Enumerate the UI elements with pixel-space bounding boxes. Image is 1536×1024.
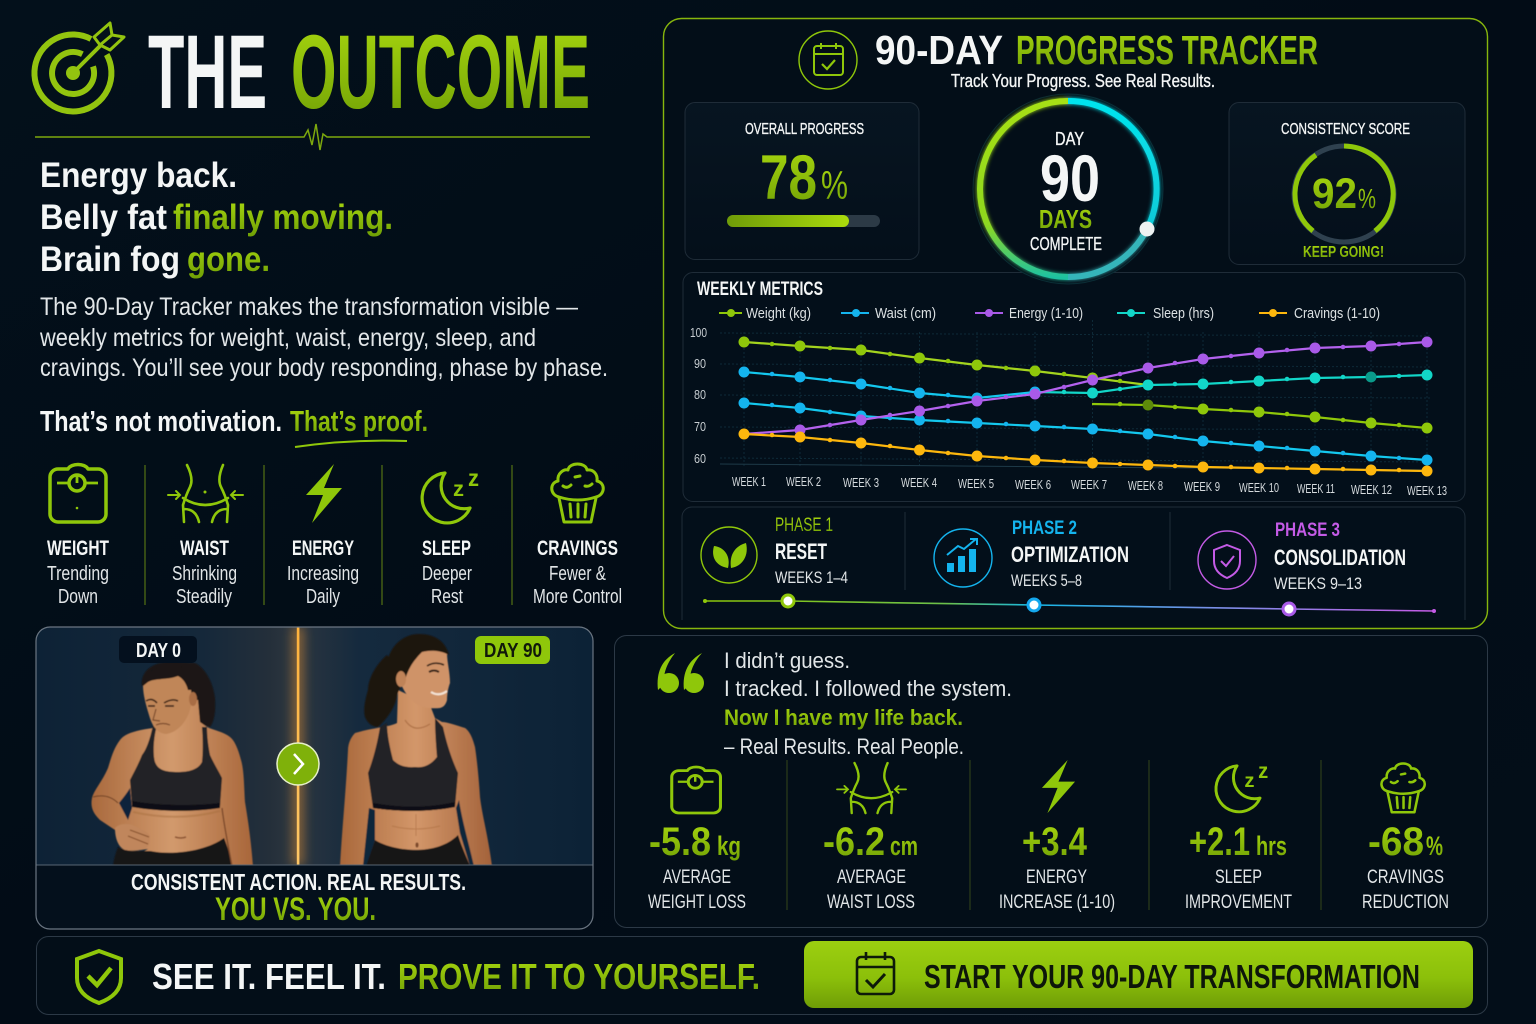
metric: waist [168, 465, 243, 608]
slogan [152, 956, 760, 997]
y axis labels [690, 325, 707, 466]
icon: moon [422, 465, 479, 523]
icon: leaves [701, 527, 757, 583]
phase 2: OPTIMIZATION [1011, 542, 1129, 567]
phase 1: PHASE 1 [775, 515, 833, 536]
gauge: day 90 ring: DAYS [1039, 204, 1092, 234]
chart legend: Sleep (hrs) [1153, 305, 1214, 322]
arrow: before to after [277, 743, 319, 785]
stat: energy increase: ENERGY [1026, 867, 1087, 888]
phase 3 [1198, 520, 1406, 593]
body paragraph: weekly metrics for weight, waist, energy, sleep, and [39, 324, 536, 352]
chart legend: Energy (1-10) [1009, 305, 1083, 322]
phase 2: PHASE 2 [1012, 518, 1077, 539]
icon: lightning bolt [1042, 760, 1075, 813]
icon: calendar [857, 952, 894, 994]
title: OUTCOME [291, 14, 590, 131]
icon: muffin [552, 464, 603, 522]
x axis labels [732, 474, 1447, 498]
icon: shield check [77, 951, 121, 1003]
stat: waist loss: AVERAGE [837, 867, 906, 888]
gauge: day 90 ring: COMPLETE [1030, 234, 1102, 254]
panel: phases [682, 507, 1465, 620]
bottom call to action bar [36, 936, 1488, 1014]
label: day 0 [119, 636, 197, 663]
phase timeline [703, 595, 1436, 615]
testimonial text: I tracked. I followed the system. [724, 676, 1012, 701]
headline [40, 156, 393, 279]
testimonial text: Now I have my life back. [724, 705, 963, 730]
card: overall progress [685, 102, 919, 260]
panel: before and after photo [36, 627, 593, 929]
series: energy [744, 336, 1432, 436]
photo comparison [36, 627, 593, 866]
icon: target with arrow [34, 23, 124, 111]
headline: gone. [187, 240, 270, 279]
icon: lightning bolt [306, 464, 342, 523]
stat: energy increase: +3.4 [1022, 820, 1088, 864]
metric: energy [287, 464, 359, 608]
testimonial text: I didn’t guess. [724, 648, 850, 673]
phase 1 [701, 515, 848, 587]
chart legend [719, 305, 1380, 322]
gauge: day 90 ring: 90 [1040, 141, 1100, 215]
icon: waist [837, 763, 906, 813]
stat: waist loss: -6.2 [823, 820, 885, 864]
stat: cravings reduction: % [1426, 831, 1443, 861]
tracker header: PROGRESS TRACKER [1016, 27, 1318, 73]
metric: weight: WEIGHT [47, 537, 109, 560]
glowing divider [292, 627, 304, 865]
panel: progress tracker [664, 18, 1488, 628]
body paragraph [39, 293, 608, 382]
x axis labels: WEEK 2 [786, 474, 821, 489]
x axis labels: WEEK 8 [1128, 478, 1163, 493]
metric: weight: Trending [47, 563, 109, 585]
chart legend: Cravings (1-10) [1294, 305, 1380, 322]
quote mark [658, 653, 704, 693]
icon: calendar [799, 31, 857, 89]
card: consistency score: 92 [1312, 170, 1357, 218]
x axis labels: WEEK 4 [901, 475, 937, 490]
metric: waist: Steadily [176, 586, 232, 608]
label: day 0: DAY 0 [136, 640, 181, 662]
x axis labels: WEEK 1 [732, 474, 766, 489]
card: overall progress: OVERALL PROGRESS [745, 121, 864, 138]
left header [34, 14, 590, 131]
metric: weight [47, 464, 109, 608]
y axis labels: 70 [694, 419, 706, 434]
metric: energy: ENERGY [292, 537, 354, 560]
x axis labels: WEEK 9 [1184, 479, 1220, 494]
phase 1: RESET [775, 539, 827, 564]
card: consistency score: % [1358, 183, 1376, 214]
metric: cravings: Fewer & [549, 563, 607, 585]
x axis labels: WEEK 12 [1351, 482, 1392, 497]
metric: waist: Shrinking [172, 563, 237, 585]
metric: sleep: Deeper [422, 563, 472, 585]
stat: cravings reduction: CRAVINGS [1367, 867, 1444, 888]
label: day 90: DAY 90 [484, 640, 542, 662]
stat: cravings reduction [1362, 764, 1449, 913]
x axis labels: WEEK 10 [1239, 480, 1279, 495]
y axis labels: 90 [694, 356, 706, 371]
stat: sleep improvement [1185, 760, 1292, 913]
body paragraph: cravings. You’ll see your body responding, phase by phase. [40, 354, 608, 382]
heartbeat divider [35, 124, 590, 150]
tracker header: Track Your Progress. See Real Results. [951, 71, 1215, 91]
metric icon row [47, 464, 622, 608]
testimonial text: – Real Results. Real People. [724, 734, 964, 759]
testimonial text [724, 648, 1012, 759]
caption [131, 869, 466, 927]
icon: moon: z [453, 478, 464, 501]
panel: weekly metrics chart: WEEKLY METRICS [697, 279, 823, 300]
chart legend: Waist (cm) [875, 305, 936, 322]
tracker header [799, 27, 1318, 91]
proof statement: That’s not motivation. [40, 406, 282, 438]
series: waist [738, 366, 1432, 466]
tracker header: 90-DAY [875, 27, 1003, 73]
metric: sleep: SLEEP [422, 537, 471, 560]
caption: YOU VS. YOU. [215, 891, 376, 927]
person: day 0 [91, 662, 253, 866]
slogan: PROVE IT TO YOURSELF. [398, 956, 760, 997]
stat: weight loss: -5.8 [649, 820, 711, 864]
icon: moon: z [1244, 771, 1254, 792]
metric: cravings [533, 464, 622, 608]
stat: weight loss [648, 767, 746, 913]
headline: finally moving. [173, 198, 393, 237]
phase 2 [934, 518, 1129, 590]
series: cravings [738, 428, 1432, 476]
stat: sleep improvement: IMPROVEMENT [1185, 892, 1292, 913]
card: consistency score: CONSISTENCY SCORE [1281, 121, 1410, 138]
icon: moon: z [468, 465, 479, 491]
metric: energy: Daily [306, 586, 340, 608]
gauge: day 90 ring: DAY [1055, 129, 1084, 149]
x axis labels: WEEK 13 [1407, 483, 1447, 498]
slogan: SEE IT. FEEL IT. [152, 956, 386, 997]
icon: muffin [1381, 764, 1425, 812]
stat: cravings reduction: REDUCTION [1362, 892, 1449, 913]
headline: Energy back. [40, 156, 237, 195]
proof statement: That’s proof. [290, 406, 428, 438]
body paragraph: The 90-Day Tracker makes the transformation visible — [40, 293, 578, 321]
x axis labels: WEEK 6 [1015, 477, 1051, 492]
label: day 90 [475, 636, 550, 664]
metric: sleep: Rest [431, 586, 463, 608]
icon: scale [50, 464, 106, 522]
stat: weight loss: WEIGHT LOSS [648, 892, 746, 913]
y axis labels: 80 [694, 387, 706, 402]
proof statement [40, 406, 428, 447]
phase 1: WEEKS 1–4 [775, 568, 848, 587]
metric: waist: WAIST [180, 537, 229, 560]
x axis labels: WEEK 7 [1071, 477, 1107, 492]
phase 3: CONSOLIDATION [1274, 545, 1406, 570]
stat: weight loss: AVERAGE [663, 867, 731, 888]
panel: weekly metrics chart [683, 272, 1465, 502]
gauge: day 90 ring [973, 94, 1163, 284]
y axis labels: 100 [690, 325, 707, 340]
icon: waist [168, 465, 243, 522]
stat: sleep improvement: SLEEP [1215, 867, 1262, 888]
metric: cravings: More Control [533, 586, 622, 608]
card: consistency score [1229, 102, 1465, 264]
stat: energy increase: INCREASE (1-10) [999, 892, 1115, 913]
y axis labels: 60 [694, 451, 706, 466]
icon: shield check [1198, 531, 1256, 589]
caption: CONSISTENT ACTION. REAL RESULTS. [131, 869, 466, 895]
stat: cravings reduction: -68 [1368, 820, 1424, 864]
metric: energy: Increasing [287, 563, 359, 585]
stat: weight loss: kg [717, 831, 741, 861]
series: weight [738, 336, 1432, 434]
stat: sleep improvement: +2.1 [1189, 820, 1250, 864]
phase 2: WEEKS 5–8 [1011, 571, 1082, 590]
phase 3: WEEKS 9–13 [1274, 574, 1362, 593]
icon: rising bars [934, 529, 992, 587]
stat: waist loss: cm [890, 831, 918, 861]
card: overall progress: 78 [760, 143, 817, 213]
icon: scale [672, 767, 720, 813]
stat: waist loss: WAIST LOSS [827, 892, 915, 913]
phase 3: PHASE 3 [1275, 520, 1340, 541]
person: day 90 [340, 634, 492, 866]
series: sleep [1035, 370, 1432, 398]
headline: Belly fat [40, 198, 167, 237]
metric: cravings: CRAVINGS [537, 537, 618, 560]
chart legend: Weight (kg) [746, 305, 811, 322]
metric: sleep [422, 465, 479, 608]
panel: testimonial and results [614, 636, 1488, 928]
title [148, 14, 590, 131]
icon: moon [1216, 760, 1268, 812]
icon: moon: z [1258, 760, 1268, 783]
stat: energy increase [999, 760, 1115, 913]
title: THE [148, 14, 267, 131]
x axis labels: WEEK 11 [1297, 481, 1335, 496]
x axis labels: WEEK 5 [958, 476, 994, 491]
x axis labels: WEEK 3 [843, 475, 879, 490]
stat: waist loss [823, 763, 918, 913]
metric: weight: Down [58, 586, 98, 608]
headline: Brain fog [40, 240, 180, 279]
stat: sleep improvement: hrs [1256, 831, 1287, 861]
card: overall progress: % [821, 164, 848, 208]
card: consistency score: KEEP GOING! [1303, 244, 1384, 261]
button: start transformation [804, 941, 1473, 1008]
